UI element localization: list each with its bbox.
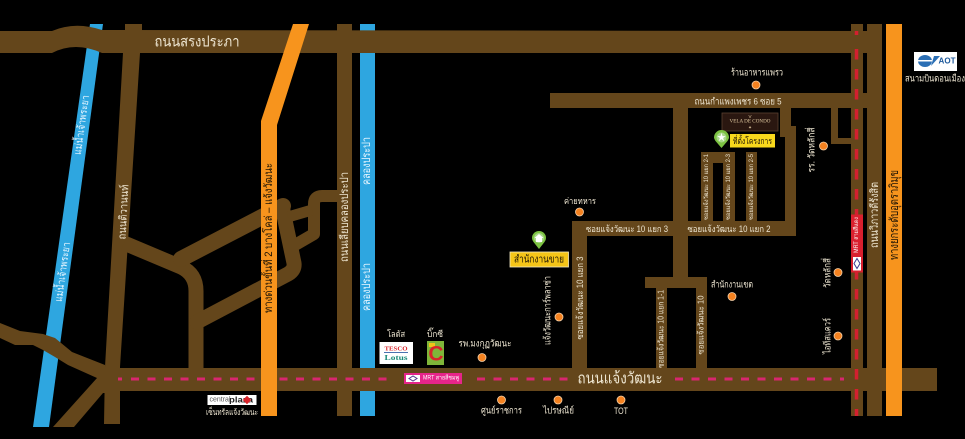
poi: hospital bbox=[458, 338, 512, 362]
road label: Songprapha: ถนนสรงประภา bbox=[154, 34, 240, 50]
logo: Central Plaza: plaza bbox=[229, 396, 254, 404]
marker: project location: ที่ตั้งโครงการ bbox=[733, 134, 772, 146]
logo: AOT Don Mueang Airport bbox=[905, 52, 965, 84]
poi: IT Square bbox=[822, 318, 842, 355]
logo: Big C: บิ๊กซี bbox=[427, 327, 443, 339]
logo: Tesco Lotus: TESCO bbox=[384, 346, 408, 352]
expressway: Bang Khlo to Chaeng Watthana: ทางด่วนขั้นที่ 2 บางโคล่ – แจ้งวัฒนะ bbox=[260, 163, 275, 313]
poi: school bbox=[804, 127, 828, 172]
expressway: Uttaraphimuk tollway: ทางยกระดับอุตราภิมุข bbox=[887, 170, 902, 260]
poi: Government Center bbox=[481, 396, 522, 416]
marker: project location bbox=[714, 130, 775, 148]
marker: project location: ★ bbox=[717, 132, 726, 142]
poi: Post office: ไปรษณีย์ bbox=[542, 404, 574, 416]
road label: Soi 10 Yaek 2-3: ซอยแจ้งวัฒนะ 10 แยก 2-3 bbox=[725, 153, 732, 220]
badge: MRT pink line bbox=[404, 373, 462, 384]
logo: AOT Don Mueang Airport: AOT bbox=[938, 56, 956, 66]
badge: MRT red line bbox=[851, 214, 863, 272]
poi: Government Center: ศูนย์ราชการ bbox=[481, 404, 522, 416]
poi: Wat Lak Si bbox=[820, 258, 842, 288]
logo: Vela De Condo: VELA DE CONDO bbox=[730, 120, 771, 124]
poi: Chaeng Watthana car plaza bbox=[542, 276, 563, 345]
expressway: Bang Khlo to Chaeng Watthana bbox=[260, 24, 309, 416]
poi: Post office bbox=[542, 396, 574, 416]
logo: Vela De Condo bbox=[722, 113, 778, 131]
badge: MRT pink line: MRT สายสีชมพู bbox=[423, 374, 459, 382]
road label: Tiwanon: ถนนติวานนท์ bbox=[116, 184, 131, 240]
road label: Soi 10 Yaek 2: ซอยแจ้งวัฒนะ 10 แยก 2 bbox=[688, 224, 770, 234]
road label: Soi 10 Yaek 2-5: ซอยแจ้งวัฒนะ 10 แยก 2-5 bbox=[748, 153, 755, 220]
poi: district office bbox=[711, 280, 753, 300]
poi: army camp: ค่ายทหาร bbox=[564, 196, 596, 206]
logo: Tesco Lotus bbox=[380, 329, 413, 364]
road label: Soi 10 Yaek 3 vertical: ซอยแจ้งวัฒนะ 10 แยก 3 bbox=[575, 256, 585, 340]
poi: school: รร. วัดหลักสี่ bbox=[804, 127, 818, 172]
logo: Tesco Lotus: Lotus bbox=[384, 353, 408, 362]
poi: army camp bbox=[564, 196, 596, 216]
river: Chao Phraya bbox=[33, 24, 103, 427]
pink line dashes bbox=[118, 378, 844, 380]
expressway: Uttaraphimuk tollway bbox=[886, 24, 902, 416]
canal label lower: คลองประปา bbox=[361, 263, 373, 311]
road label: Liap Khlong Prapa: ถนนเลียบคลองประปา bbox=[338, 172, 351, 262]
logo: Tesco Lotus: โลตัส bbox=[387, 329, 405, 339]
poi: district office: สำนักงานเขต bbox=[711, 280, 753, 290]
logo: Central Plaza bbox=[206, 395, 258, 417]
logo: Central Plaza: central bbox=[210, 396, 231, 404]
marker: sales office: สำนักงานขาย bbox=[514, 254, 564, 266]
logo: Central Plaza: เซ็นทรัลแจ้งวัฒนะ bbox=[206, 406, 258, 417]
road label: Vibhavadi Rangsit: ถนนวิภาวดีรังสิต bbox=[868, 182, 881, 248]
canal: Khlong Prapa bbox=[360, 24, 375, 416]
badge: MRT red line: MRT สายสีแดง bbox=[852, 217, 860, 253]
logo: Vela De Condo: ✦ bbox=[748, 125, 752, 130]
poi: restaurant bbox=[731, 68, 783, 89]
road label: Soi 10 Yaek 3 horizontal: ซอยแจ้งวัฒนะ 10 แยก 3 bbox=[586, 224, 668, 234]
poi: TOT: TOT bbox=[614, 406, 628, 416]
marker: sales office bbox=[510, 231, 568, 267]
road label: Soi 10 Yaek 2-1: ซอยแจ้งวัฒนะ 10 แยก 2-1 bbox=[703, 153, 710, 220]
poi: Chaeng Watthana car plaza: แจ้งวัฒนะการ์พลาซ่า bbox=[542, 276, 554, 345]
river: Chao Phraya: แม่น้ำเจ้าพระยา bbox=[70, 94, 92, 156]
canal label upper: คลองประปา bbox=[361, 137, 373, 185]
road label: Soi 10 Yaek 1-1: ซอยแจ้งวัฒนะ 10 แยก 1-1 bbox=[656, 290, 666, 368]
river: Chao Phraya: แม่น้ำเจ้าพระยา bbox=[51, 241, 73, 303]
poi: restaurant: ร้านอาหารแพรว bbox=[731, 68, 783, 78]
poi: TOT bbox=[614, 396, 628, 416]
road label: Chaeng Watthana: ถนนแจ้งวัฒนะ bbox=[578, 370, 662, 388]
poi: Wat Lak Si: วัดหลักสี่ bbox=[820, 258, 834, 288]
poi: hospital: รพ.มงกุฏวัฒนะ bbox=[458, 338, 512, 350]
road label: Kamphaeng Phet 6 Soi 5: ถนนกำแพงเพชร 6 ซอย 5 bbox=[694, 96, 782, 108]
logo: Big C bbox=[427, 327, 444, 366]
poi: IT Square: ไอทีสแควร์ bbox=[822, 318, 834, 355]
logo: Vela De Condo: V bbox=[748, 114, 752, 119]
red line dashes bbox=[855, 31, 858, 416]
road label: Soi 10: ซอยแจ้งวัฒนะ 10 bbox=[696, 295, 706, 354]
logo: Big C: C bbox=[428, 342, 444, 366]
